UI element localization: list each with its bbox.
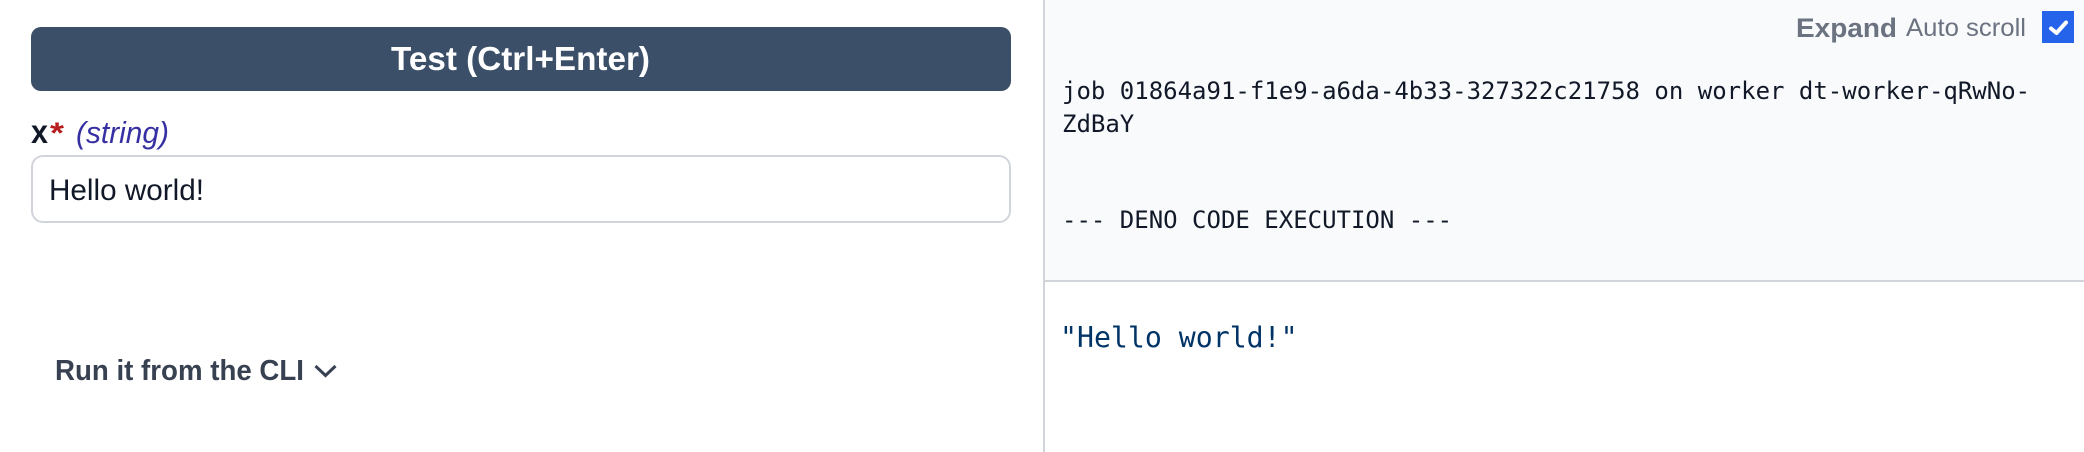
panel: logs <box>1043 0 2084 452</box>
expand button: Expand <box>1796 13 1897 43</box>
test button: Test (Ctrl+Enter) <box>391 40 650 77</box>
panel: result <box>1045 282 2084 452</box>
run from CLI toggle: Run it from the CLI <box>55 355 304 387</box>
log text: job 01864a91-f1e9-a6da-4b33-327322c21758 on worker dt-worker-qRwNo- <box>1062 77 2030 105</box>
test button <box>31 27 1011 91</box>
auto scroll label: Auto scroll <box>1906 14 2026 42</box>
log text: --- DENO CODE EXECUTION --- <box>1062 206 1452 234</box>
field label: x required string <box>31 113 169 150</box>
result output: "Hello world!" <box>1060 321 1298 354</box>
panel: test form <box>0 0 1043 452</box>
auto scroll checkbox <box>2042 11 2074 43</box>
log text: ZdBaY <box>1062 110 1135 138</box>
text input: Hello world! <box>49 174 204 207</box>
field label: x required string: x <box>31 113 49 150</box>
field label: x required string: * <box>50 117 64 150</box>
divider <box>1045 280 2084 282</box>
field label: x required string: (string) <box>76 115 169 150</box>
log text <box>1062 77 2030 234</box>
icon: chevron down <box>316 366 336 376</box>
text input <box>32 156 1010 222</box>
